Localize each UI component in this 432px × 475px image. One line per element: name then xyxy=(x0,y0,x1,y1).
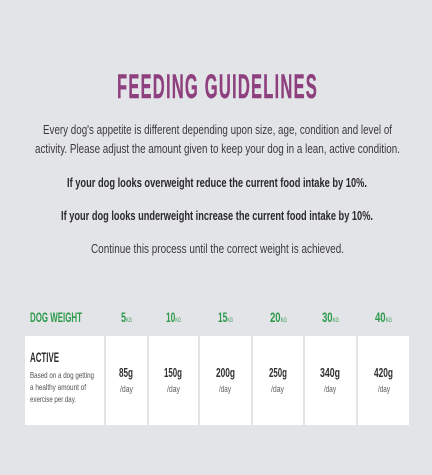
weight header row: 40KG xyxy=(375,309,392,325)
10kg cell: 150g xyxy=(164,366,182,380)
weight header row: 30KG xyxy=(322,309,339,325)
intro text xyxy=(35,122,400,156)
weight header row: DOG WEIGHT xyxy=(30,309,82,325)
weight header row: 5KG xyxy=(121,309,132,325)
10kg cell xyxy=(149,336,198,425)
active description cell: a healthy amount of xyxy=(30,382,86,392)
active description cell: ACTIVE xyxy=(30,349,59,365)
5kg cell: /day xyxy=(120,384,133,394)
30kg cell xyxy=(305,336,356,425)
10kg cell: /day xyxy=(167,384,180,394)
weight header row xyxy=(30,309,392,325)
weight header row: 15KG xyxy=(218,309,233,325)
15kg cell: 200g xyxy=(216,366,235,380)
40kg cell: 420g xyxy=(374,366,393,380)
weight header row: 10KG xyxy=(166,309,181,325)
20kg cell xyxy=(253,336,303,425)
30kg cell: /day xyxy=(324,384,336,394)
active description cell: exercise per day. xyxy=(30,394,76,404)
closing note: Continue this process until the correct weight is achieved. xyxy=(91,241,344,256)
20kg cell: /day xyxy=(271,384,284,394)
active description cell xyxy=(25,336,104,425)
5kg cell: 85g xyxy=(119,366,133,380)
15kg cell: /day xyxy=(219,384,231,394)
20kg cell: 250g xyxy=(269,366,287,380)
feeding table xyxy=(25,309,409,425)
40kg cell xyxy=(358,336,409,425)
5kg cell xyxy=(106,336,147,425)
weight header row: 20KG xyxy=(270,309,287,325)
40kg cell: /day xyxy=(378,384,390,394)
30kg cell: 340g xyxy=(320,366,340,380)
15kg cell xyxy=(200,336,251,425)
active description cell: Based on a dog getting xyxy=(30,370,94,380)
